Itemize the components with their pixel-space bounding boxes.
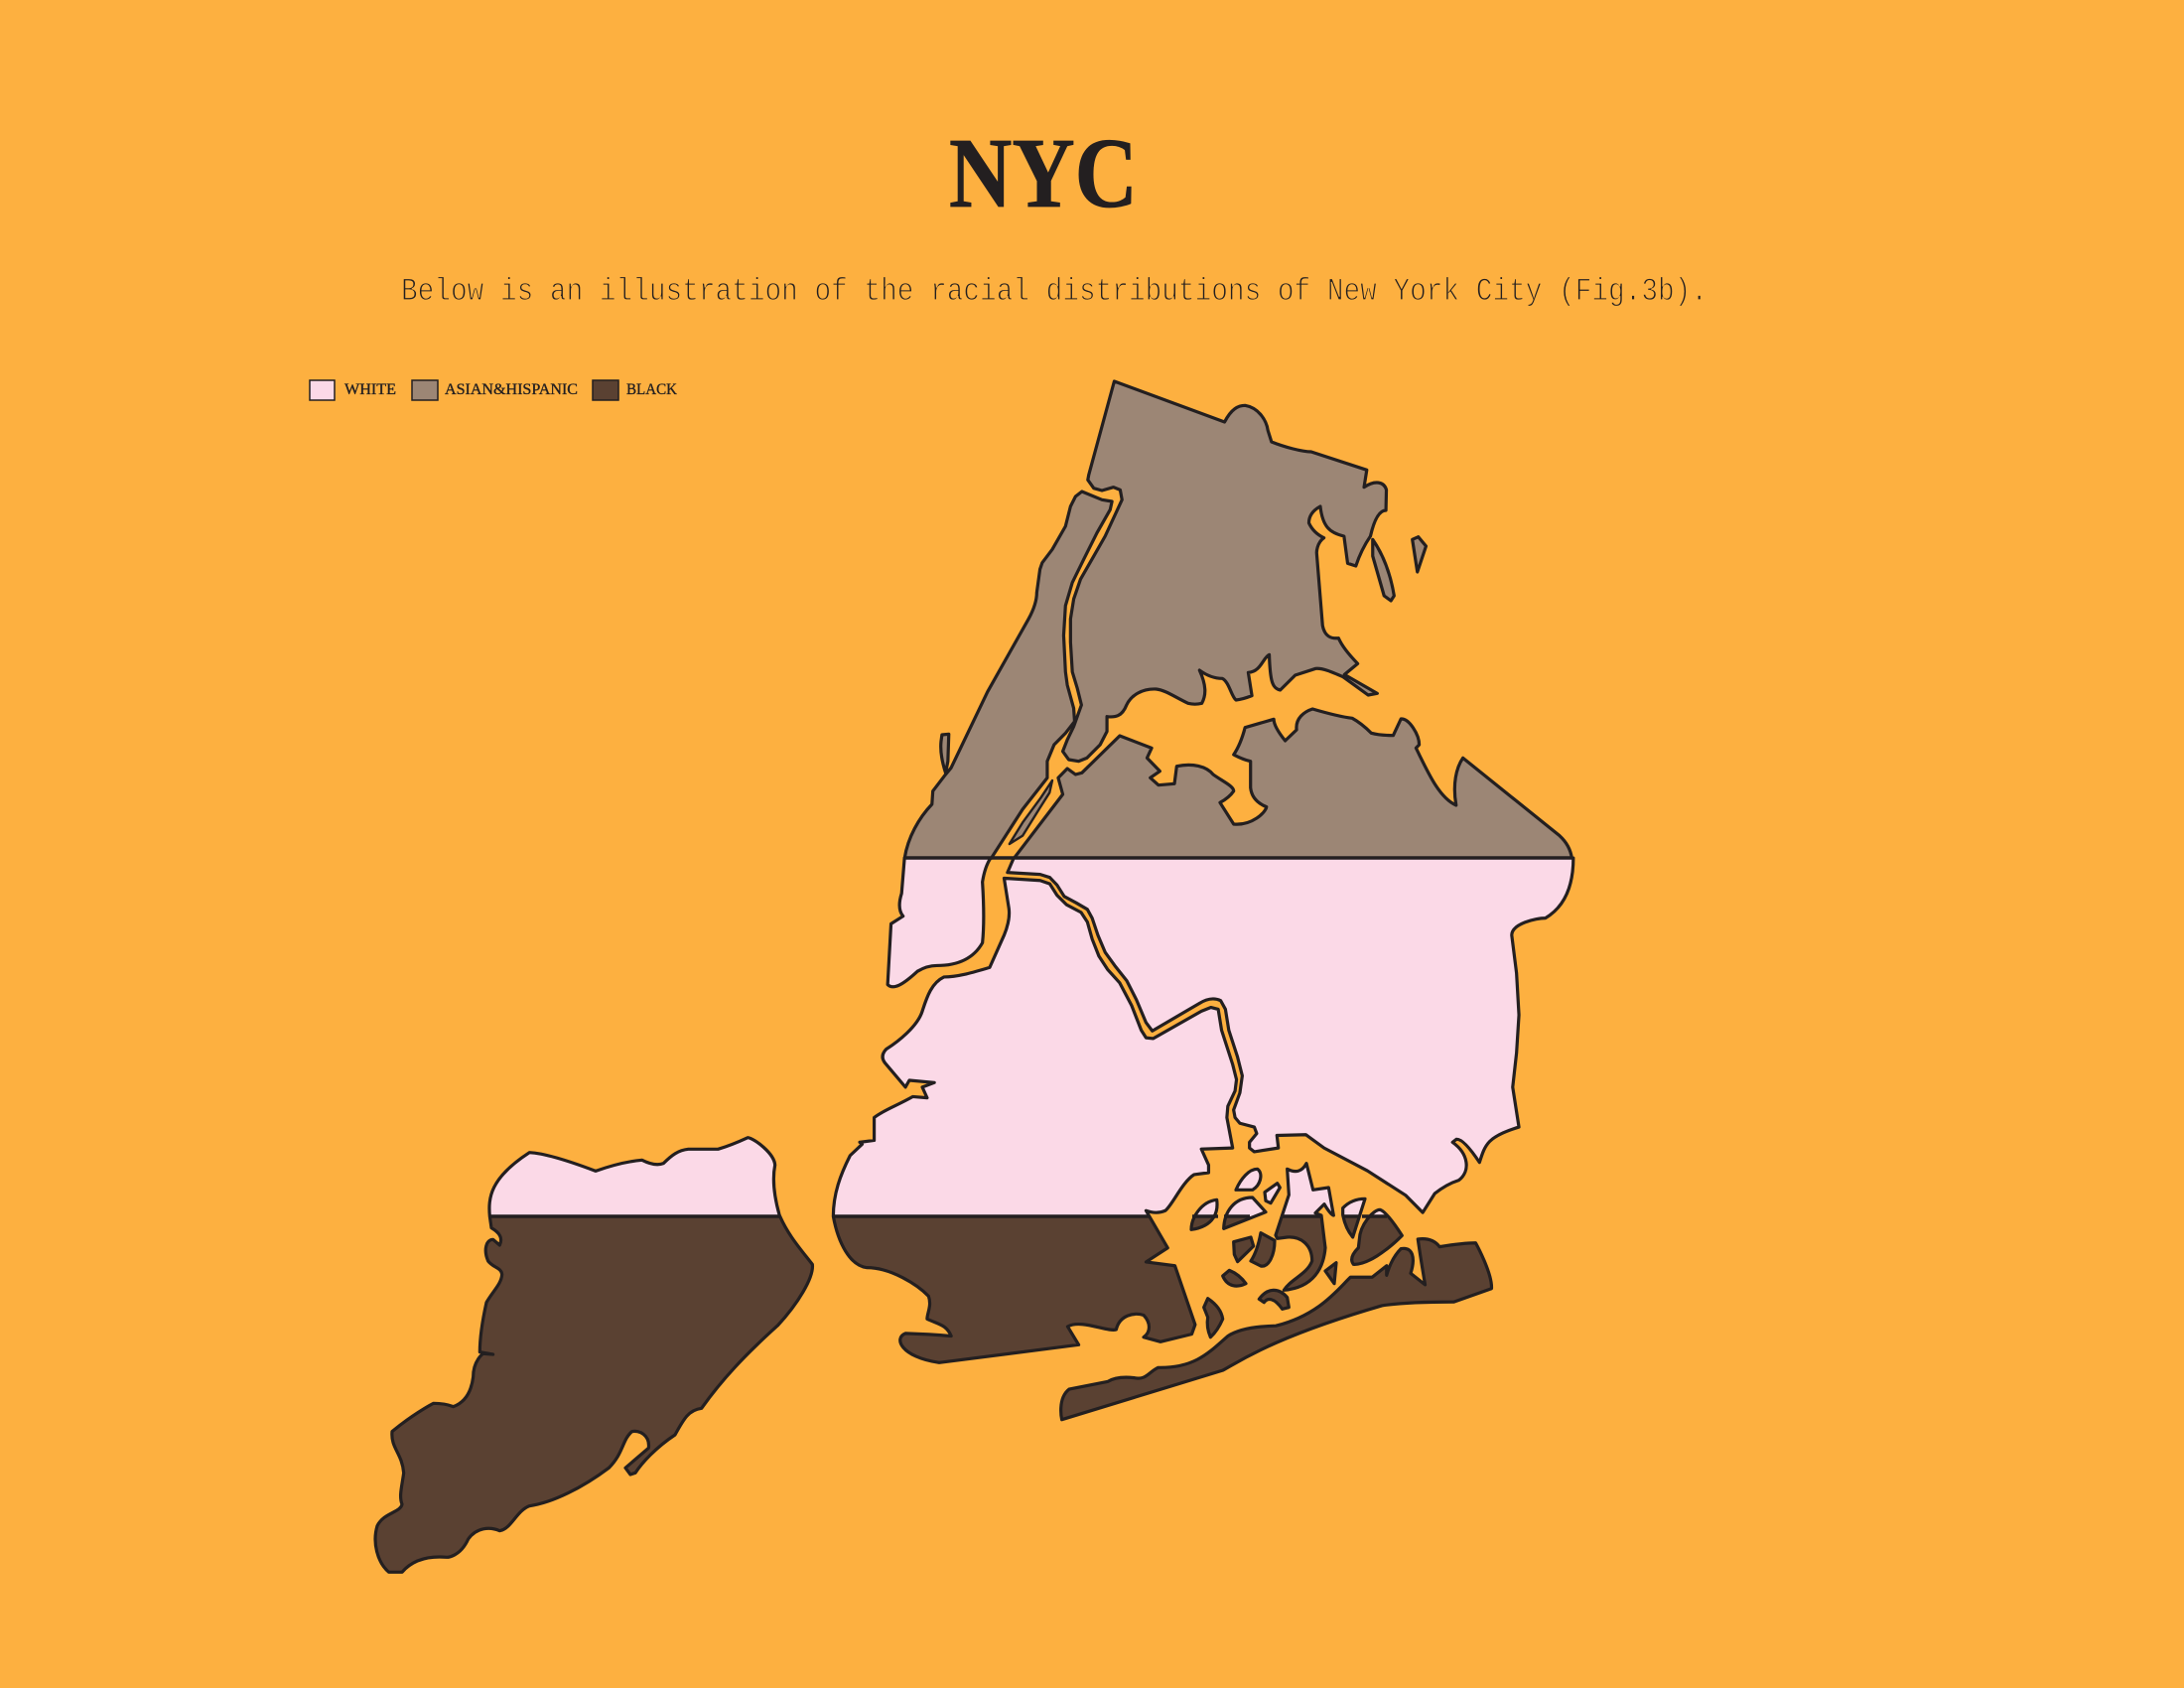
legend item: white	[310, 380, 396, 400]
legend item: white: WHITE	[344, 381, 396, 398]
bay island: east wedge	[1343, 1198, 1365, 1237]
bay island: brown oval	[1223, 1270, 1246, 1286]
Jamaica Bay islands	[1191, 1164, 1402, 1337]
bay island: small	[1265, 1184, 1280, 1203]
map section: upper band, asian and hispanic	[904, 381, 1571, 858]
legend item: black	[593, 380, 677, 400]
upper Manhattan	[904, 492, 1112, 858]
subtitle: Below is an illustration of the racial distributions of New York City (Fig.3b).	[401, 273, 1707, 310]
small island far east	[1413, 537, 1426, 572]
small island west	[941, 734, 949, 773]
bay island: large jagged marsh	[1276, 1164, 1333, 1290]
Queens	[1008, 858, 1573, 1212]
Rockaway	[1061, 1239, 1491, 1420]
map of NYC	[375, 381, 1573, 1572]
bay island: brown small	[1234, 1237, 1254, 1262]
bay island: west dome	[1191, 1199, 1217, 1229]
legend item: asian and hispanic	[412, 380, 578, 400]
legend item: black: BLACK	[626, 381, 677, 398]
bay island: oval	[1236, 1169, 1261, 1190]
legend	[310, 380, 677, 400]
band line across Staten Island	[490, 1214, 780, 1218]
bay island: brown mid	[1251, 1233, 1275, 1266]
bay island: half dome	[1224, 1197, 1266, 1228]
small island east	[1373, 539, 1394, 601]
Roosevelt Island	[1010, 780, 1052, 844]
bay island: south	[1204, 1299, 1223, 1337]
horizontal band line: upper	[904, 856, 1572, 860]
bay island: hook	[1259, 1290, 1289, 1309]
Bronx	[1063, 381, 1387, 762]
legend item: asian and hispanic: ASIAN&HISPANIC	[445, 381, 578, 398]
bay island: JFK shoal	[1352, 1209, 1402, 1264]
upper Queens and Brooklyn	[1014, 709, 1571, 858]
bay island: triangle	[1325, 1263, 1336, 1284]
band line across Brooklyn	[833, 1214, 1149, 1218]
infographic canvas	[309, 139, 1701, 1574]
title: NYC	[949, 117, 1138, 228]
lower Manhattan	[887, 858, 991, 987]
band line across bay islands	[1192, 1214, 1387, 1218]
Staten Island	[375, 1138, 812, 1572]
Brooklyn	[833, 878, 1237, 1362]
